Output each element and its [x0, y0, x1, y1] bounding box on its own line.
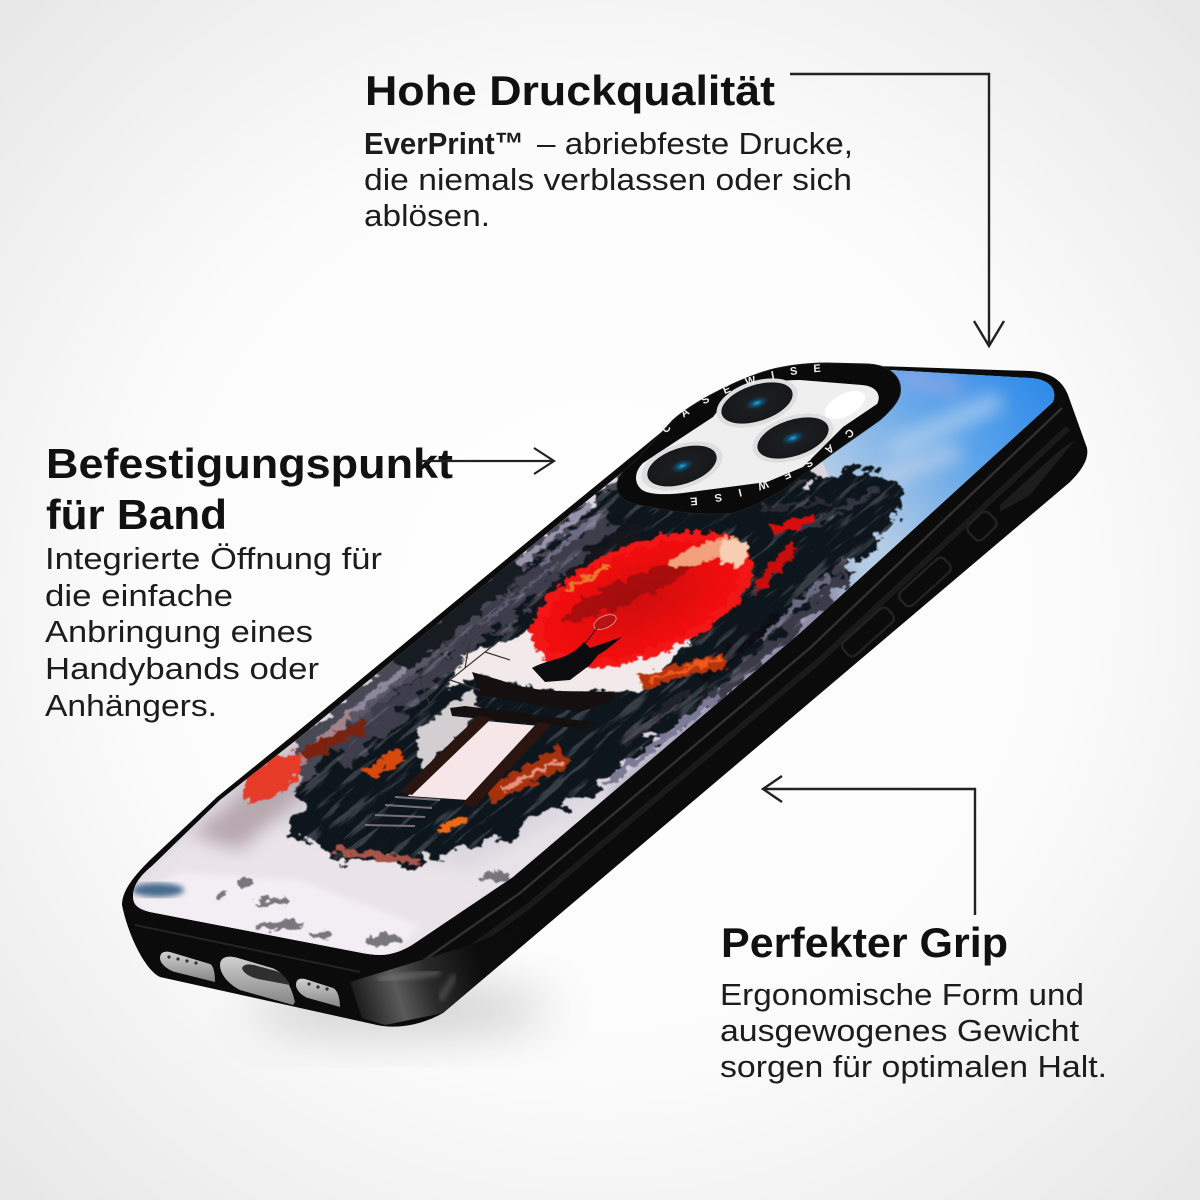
snow specks — [214, 871, 509, 946]
lens left — [635, 432, 729, 500]
heading: strap attachment — [46, 440, 453, 538]
ring lettering — [662, 364, 854, 506]
heading: strap attachment: für Band — [46, 491, 227, 538]
text: strap attachment: Anhängers. — [45, 688, 217, 723]
bright mist behind gate — [415, 628, 695, 772]
blue corner patch — [132, 883, 184, 897]
callout: grip — [720, 919, 1107, 1084]
lower white cloud — [133, 796, 604, 955]
sky streaks — [880, 375, 1000, 480]
lens right — [746, 404, 840, 472]
text: grip: sorgen für optimalen Halt. — [720, 1049, 1107, 1084]
side buttons — [840, 509, 999, 659]
callout: print quality — [364, 67, 853, 233]
camera ring — [616, 362, 901, 514]
ring lettering: CASEWISE — [690, 430, 854, 506]
lens top — [710, 369, 804, 437]
lavender cloud band — [610, 560, 850, 810]
blue sky — [804, 370, 1054, 630]
text: print quality: – abriebfeste Drucke, — [537, 126, 853, 161]
heading: print quality: Hohe Druckqualität — [365, 67, 775, 114]
case body — [122, 364, 1087, 1027]
orange embers — [305, 658, 725, 862]
charging port and speakers — [160, 952, 340, 1007]
camera plate — [636, 380, 879, 494]
callout: strap attachment — [45, 440, 453, 723]
heading: grip: Perfekter Grip — [721, 919, 1008, 966]
text: print quality: ablösen. — [364, 198, 490, 233]
text: strap attachment: die einfache — [45, 578, 233, 613]
red moon — [526, 513, 816, 672]
text: strap attachment: Integrierte Öffnung für — [45, 541, 382, 576]
red left patch — [242, 748, 302, 806]
text: grip: ausgewogenes Gewicht — [720, 1013, 1079, 1048]
artwork base — [120, 360, 1080, 980]
case side details — [135, 408, 1075, 1025]
snow foreground — [133, 875, 413, 955]
arrow: strap attachment — [420, 448, 554, 474]
phone shadow — [250, 984, 550, 1036]
text: print quality — [364, 126, 853, 233]
branches — [420, 640, 510, 715]
text: strap attachment: Anbringung eines — [45, 614, 313, 649]
ring lettering: CASEWISE — [662, 364, 820, 432]
upper-left grey wash — [290, 465, 650, 800]
torii gate — [400, 672, 615, 808]
text: print quality: die niemals verblassen oder sich — [364, 162, 852, 197]
heading: strap attachment: Befestigungspunkt — [46, 440, 453, 487]
stairs — [365, 797, 440, 826]
text: grip: Ergonomische Form und — [720, 977, 1084, 1012]
arrow: print quality — [790, 74, 1004, 346]
upper-left mauve edge band — [190, 745, 330, 850]
text: grip — [720, 977, 1107, 1084]
flash — [820, 385, 870, 425]
text: strap attachment: Handybands oder — [45, 651, 319, 686]
witch figure and balloon — [532, 611, 622, 682]
text: strap attachment — [45, 541, 382, 723]
phone case with artwork — [122, 362, 1088, 1027]
pale gate opening — [408, 720, 540, 800]
grey brush marks — [295, 490, 880, 785]
screen artwork — [133, 370, 1054, 955]
arrow: grip — [763, 776, 975, 915]
text: print quality: EverPrint™ — [364, 126, 524, 161]
texture flecks — [297, 476, 903, 862]
dark cloud ring — [295, 470, 905, 862]
